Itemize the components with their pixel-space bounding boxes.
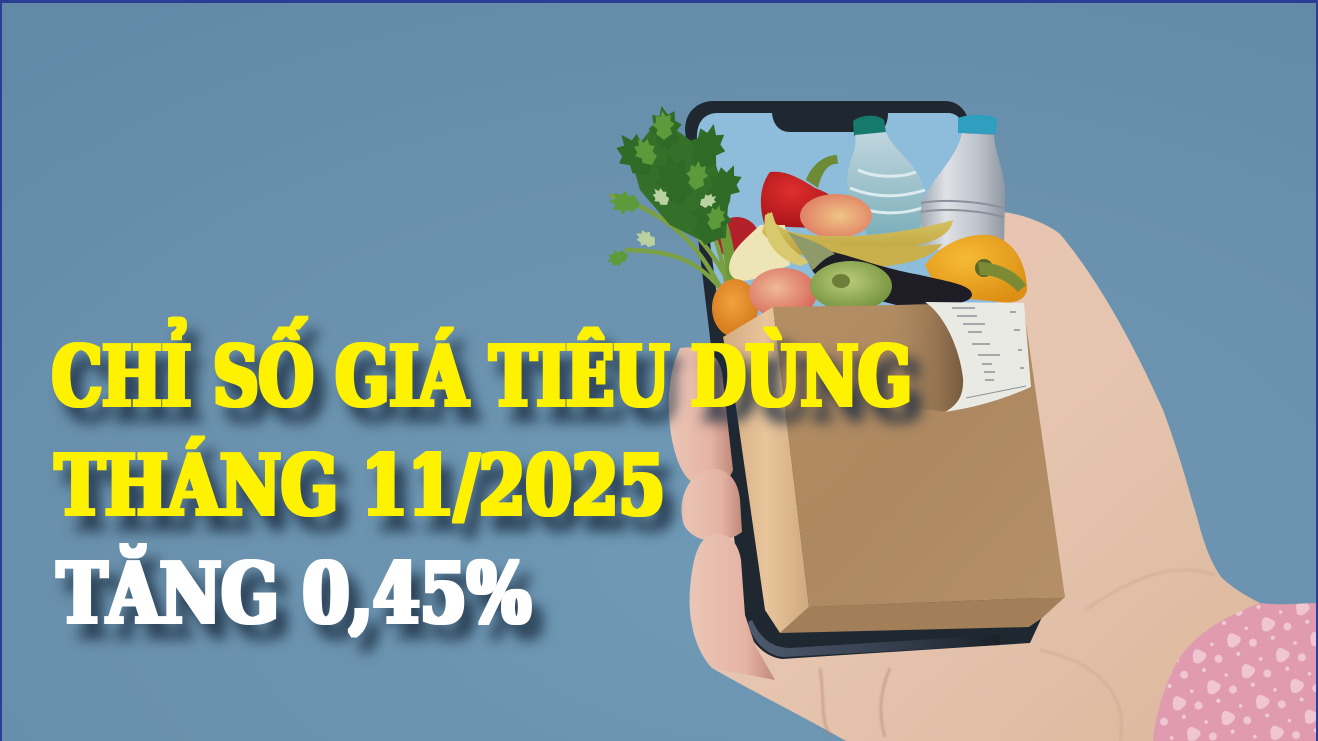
phone body xyxy=(685,101,1042,659)
hand: palm and thumb xyxy=(690,212,1262,741)
peach xyxy=(800,194,872,238)
headline line 2: THÁNG 11/2025 xyxy=(55,436,665,534)
bananas xyxy=(762,212,953,268)
phone screen xyxy=(697,113,1000,320)
headline xyxy=(52,318,912,642)
paper bag xyxy=(723,303,1065,633)
receipt xyxy=(925,302,1031,412)
red pepper xyxy=(761,155,838,228)
pink apple xyxy=(749,268,817,318)
bag side gusset xyxy=(723,307,809,633)
bag front face xyxy=(773,303,1065,607)
yellow pepper xyxy=(925,235,1027,302)
water bottle xyxy=(847,116,925,240)
phone bottom edge xyxy=(748,620,1000,657)
bag roll shading xyxy=(880,303,966,412)
green apple xyxy=(810,261,892,311)
eggplant xyxy=(788,232,972,306)
hand: sleeve xyxy=(1153,603,1318,741)
illustration: hand holding phone with groceries xyxy=(604,101,1318,741)
bag bottom face xyxy=(780,597,1065,633)
milk bottle xyxy=(920,115,1005,250)
headline line 1: CHỈ SỐ GIÁ TIÊU DÙNG xyxy=(52,318,912,426)
hand: fingers xyxy=(669,347,775,680)
red apple behind xyxy=(715,217,759,259)
orange xyxy=(712,279,758,337)
pale pear xyxy=(729,225,790,281)
headline line 3: TĂNG 0,45% xyxy=(57,544,531,642)
celery xyxy=(604,103,749,295)
hand: crease shadows xyxy=(820,570,1215,741)
